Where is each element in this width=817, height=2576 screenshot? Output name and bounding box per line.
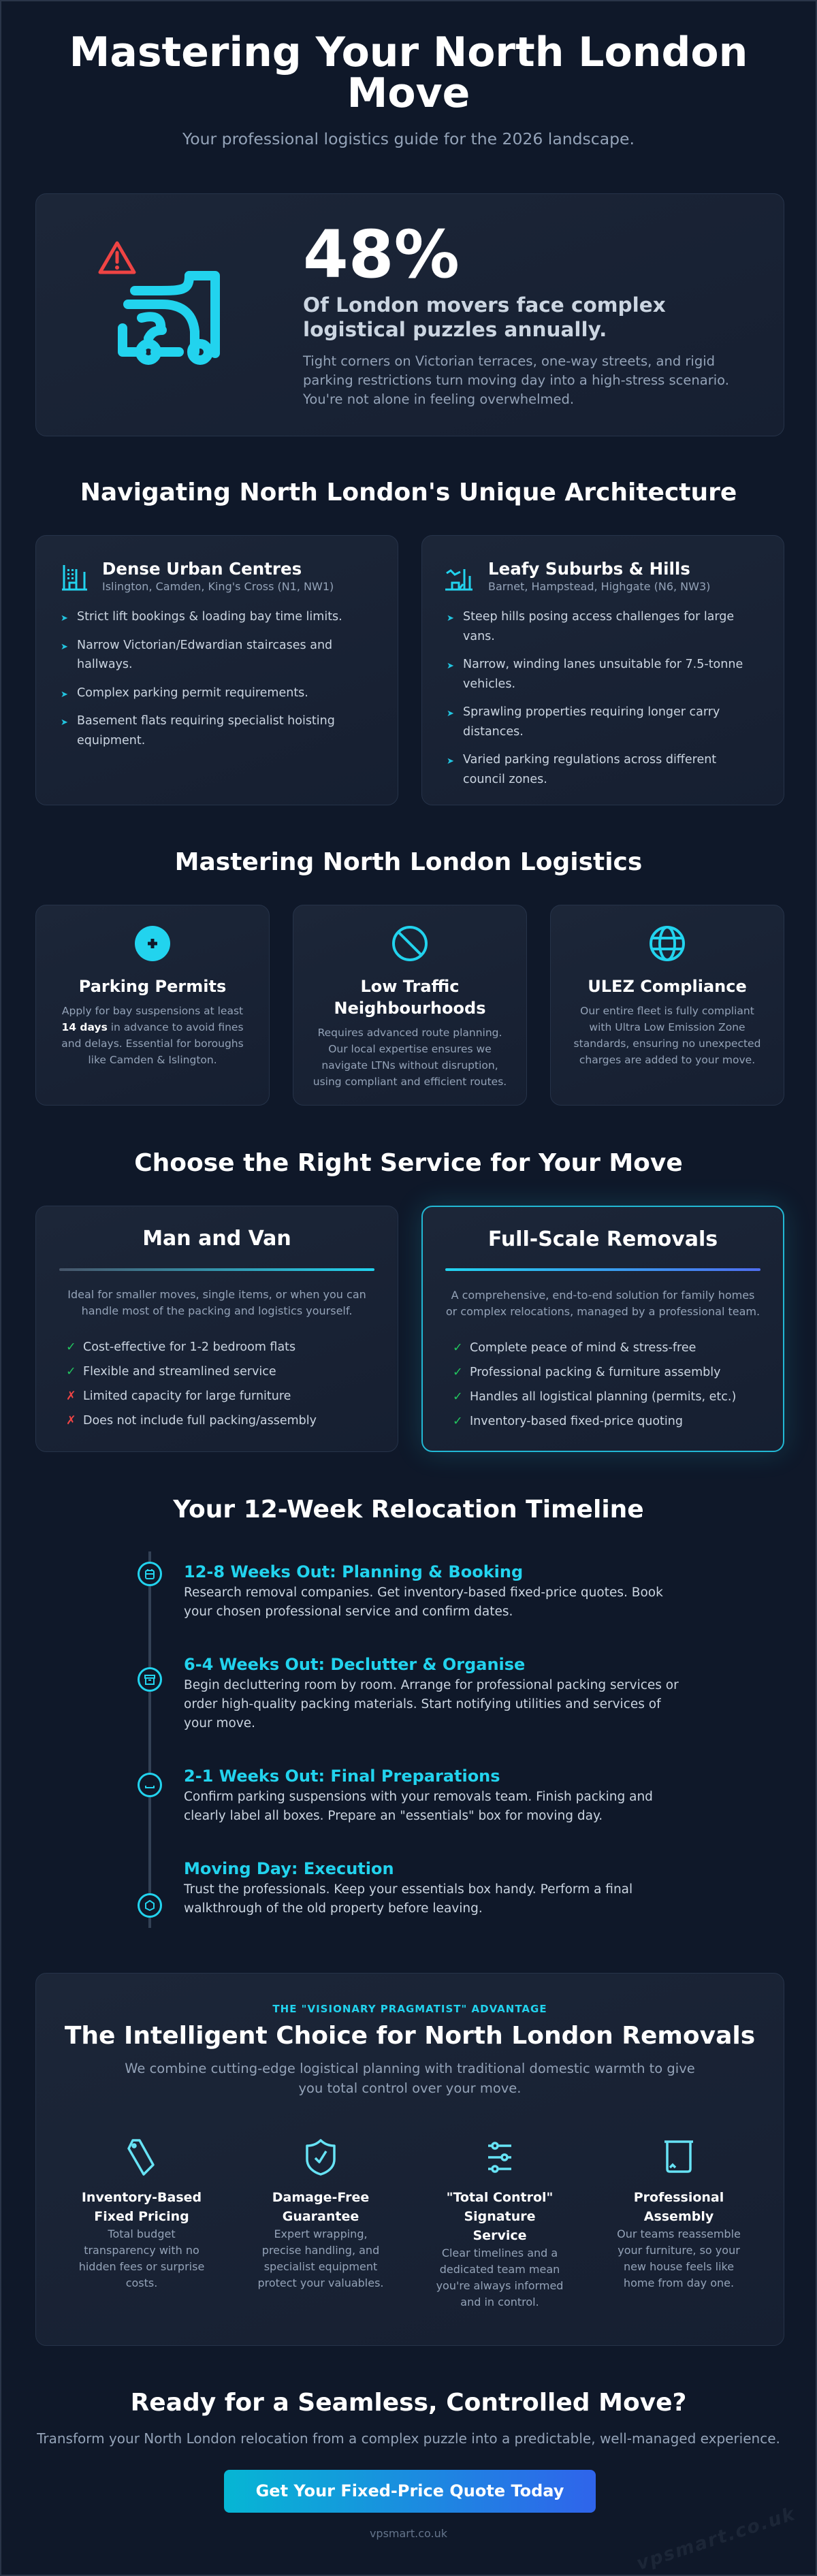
- eyebrow: THE "VISIONARY PRAGMATIST" ADVANTAGE: [272, 2003, 547, 2015]
- stat heading: logistical puzzles annually.: [303, 318, 607, 341]
- panel: full-scale removals: Complete peace of mind & stress-free: [470, 1341, 696, 1355]
- feature: assembly: Our teams reassemble your furniture, so your new house feels like home from day one.: [617, 2227, 741, 2289]
- card title: Leafy Suburbs & Hills: [488, 559, 690, 579]
- icon: warning: [98, 241, 136, 274]
- heading: The Intelligent Choice for North London Removals: [65, 2022, 755, 2050]
- title: [69, 29, 748, 117]
- panel: full-scale removals: Inventory-based fixed-price quoting: [470, 1415, 683, 1428]
- heading: services: Choose the Right Service for Your Move: [134, 1149, 683, 1177]
- bullet list: Steep hills posing access challenges for large vans.: [463, 610, 734, 643]
- step 3: [184, 1767, 653, 1823]
- icon: step 3: [138, 1773, 162, 1797]
- feature: control: Clear timelines and a dedicated team mean you're always informed and in control.: [436, 2247, 563, 2308]
- panel: parking permits: Parking Permits: [79, 977, 226, 996]
- cta button: Get Your Fixed-Price Quote Today: [256, 2481, 564, 2500]
- panel: full-scale removals: [421, 1206, 784, 1452]
- icon: permit: [135, 926, 170, 961]
- step 4: Moving Day: Execution: [184, 1859, 394, 1878]
- panel: man and van: Flexible and streamlined service: [83, 1365, 276, 1379]
- panel: hero stat: [35, 193, 784, 436]
- heading: timeline: Your 12-Week Relocation Timeline: [173, 1496, 644, 1524]
- panel: man and van: ✓: [66, 1365, 76, 1379]
- panel: full-scale removals: Full-Scale Removals: [488, 1227, 718, 1251]
- footer: vpsmart.co.uk: [370, 2527, 447, 2540]
- icon: no entry: [392, 926, 428, 961]
- cta text: Transform your North London relocation from a complex puzzle into a predictable, well-managed experience.: [37, 2430, 780, 2447]
- bullet list: [448, 610, 743, 786]
- stat number: 48%: [303, 216, 460, 293]
- bullet list: Strict lift bookings & loading bay time limits.: [77, 610, 342, 624]
- icon: step 1: [138, 1562, 162, 1586]
- feature: control: [436, 2142, 563, 2308]
- panel: ulez: Our entire fleet is fully compliant with Ultra Low Emission Zone standards, ensuring no unexpected charges are added to your move.: [574, 1005, 760, 1066]
- panel: man and van: [35, 1206, 398, 1452]
- panel: advantage: [35, 1973, 784, 2346]
- watermark: vpsmart.co.uk: [634, 2503, 799, 2575]
- panel: low traffic: [293, 905, 527, 1106]
- icon: globe: [650, 926, 685, 961]
- feature: control: "Total Control" Signature Service: [447, 2190, 553, 2243]
- icon: hills: [445, 569, 472, 591]
- feature: assembly: [617, 2140, 741, 2289]
- panel: full-scale removals: ✓: [453, 1390, 463, 1404]
- bullet list: Narrow Victorian/Edwardian staircases and hallways.: [77, 639, 332, 671]
- feature: pricing: Inventory-Based Fixed Pricing: [82, 2190, 202, 2224]
- bullet list: Basement flats requiring specialist hoisting equipment.: [77, 714, 335, 747]
- panel: full-scale removals: Professional packing & furniture assembly: [470, 1366, 720, 1379]
- panel: parking permits: [35, 905, 270, 1106]
- icon: buildings: [62, 565, 87, 591]
- icon: truck: [118, 271, 220, 365]
- stat heading: Of London movers face complex: [303, 293, 666, 317]
- feature: guarantee: [257, 2139, 384, 2289]
- step 2: [184, 1655, 679, 1730]
- panel: low traffic: Requires advanced route planning. Our local expertise ensures we navigate LTNs without disruption, using compliant and efficient routes.: [313, 1027, 507, 1088]
- step 1: Research removal companies. Get inventory-based fixed-price quotes. Book your chosen professional service and confirm dates.: [184, 1585, 663, 1619]
- step 2: Begin decluttering room by room. Arrange for professional packing services or order high-quality packing materials. Start notifying utilities and services of your move.: [184, 1678, 679, 1730]
- panel: man and van: Limited capacity for large furniture: [83, 1389, 291, 1403]
- panel: full-scale removals: ✓: [453, 1366, 463, 1379]
- bullet list: Varied parking regulations across different council zones.: [463, 753, 716, 786]
- panel: man and van: ✗: [66, 1389, 76, 1403]
- icon: step 2: [138, 1667, 162, 1692]
- panel: full-scale removals: A comprehensive, end-to-end solution for family homes: [451, 1289, 754, 1302]
- panel: full-scale removals: or complex relocations, managed by a professional team.: [446, 1305, 760, 1318]
- panel: full-scale removals: ✓: [453, 1415, 463, 1428]
- step 2: 6-4 Weeks Out: Declutter & Organise: [184, 1655, 525, 1674]
- panel: man and van: Man and Van: [142, 1227, 291, 1251]
- step 4: Trust the professionals. Keep your essentials box handy. Perform a final walkthrough of the old property before leaving.: [184, 1882, 632, 1916]
- heading: logistics: Mastering North London Logistics: [175, 848, 642, 876]
- feature: pricing: Total budget transparency with no hidden fees or surprise costs.: [79, 2227, 204, 2289]
- feature: guarantee: Damage-Free Guarantee: [272, 2190, 369, 2224]
- bullet list: Sprawling properties requiring longer carry distances.: [463, 705, 720, 738]
- card subtitle: Islington, Camden, King's Cross (N1, NW1): [102, 580, 334, 593]
- step 1: 12-8 Weeks Out: Planning & Booking: [184, 1562, 523, 1581]
- icon: step 4: [138, 1893, 162, 1918]
- title: Move: [347, 69, 470, 117]
- cta button: [224, 2470, 596, 2513]
- panel: full-scale removals: ✓: [453, 1341, 463, 1355]
- bullet list: Narrow, winding lanes unsuitable for 7.5-tonne vehicles.: [463, 658, 743, 690]
- card subtitle: Barnet, Hampstead, Highgate (N6, NW3): [488, 580, 710, 593]
- panel: low traffic: Low Traffic: [360, 977, 460, 996]
- intro: We combine cutting-edge logistical planning with traditional domestic warmth to give you total control over your move.: [125, 2061, 695, 2096]
- card title: Dense Urban Centres: [102, 559, 302, 579]
- feature: guarantee: Expert wrapping, precise handling, and specialist equipment protect your valuables.: [257, 2227, 384, 2289]
- panel: man and van: Ideal for smaller moves, single items, or when you can handle most of the packing and logistics yourself.: [67, 1288, 366, 1317]
- panel: man and van: Cost-effective for 1-2 bedroom flats: [83, 1340, 295, 1354]
- panel: low traffic: Neighbourhoods: [334, 999, 485, 1018]
- stat text: Tight corners on Victorian terraces, one-way streets, and rigid parking restrictions turn moving day into a high-stress scenario. You're not alone in feeling overwhelmed.: [303, 353, 729, 407]
- panel: ulez: ULEZ Compliance: [588, 977, 747, 996]
- heading: architecture: Navigating North London's Unique Architecture: [80, 479, 737, 506]
- panel: parking permits: Apply for bay suspensions at least 14 days in advance to avoid fines and delays. Essential for boroughs like Camden & Islington.: [61, 1005, 244, 1066]
- step 3: 2-1 Weeks Out: Final Preparations: [184, 1767, 500, 1786]
- panel: leafy suburbs: [421, 535, 784, 805]
- feature: assembly: Professional Assembly: [634, 2190, 724, 2224]
- stat heading: [303, 293, 666, 341]
- panel: ulez: [550, 905, 784, 1106]
- title: Mastering Your North London: [69, 29, 748, 76]
- panel: man and van: ✓: [66, 1340, 76, 1354]
- subtitle: Your professional logistics guide for the 2026 landscape.: [182, 129, 635, 148]
- timeline: [138, 1551, 679, 1928]
- step 4: [184, 1859, 632, 1916]
- feature: pricing: [79, 2139, 204, 2289]
- step 3: Confirm parking suspensions with your removals team. Finish packing and clearly label all boxes. Prepare an "essentials" box for moving day.: [184, 1790, 653, 1823]
- bullet list: Complex parking permit requirements.: [77, 686, 308, 700]
- panel: full-scale removals: Handles all logistical planning (permits, etc.): [470, 1390, 736, 1404]
- cta heading: Ready for a Seamless, Controlled Move?: [131, 2389, 686, 2417]
- step 1: [184, 1562, 663, 1619]
- panel: man and van: Does not include full packing/assembly: [83, 1414, 317, 1428]
- panel: dense urban centres: [35, 535, 398, 805]
- panel: man and van: ✗: [66, 1414, 76, 1428]
- bullet list: [61, 610, 342, 747]
